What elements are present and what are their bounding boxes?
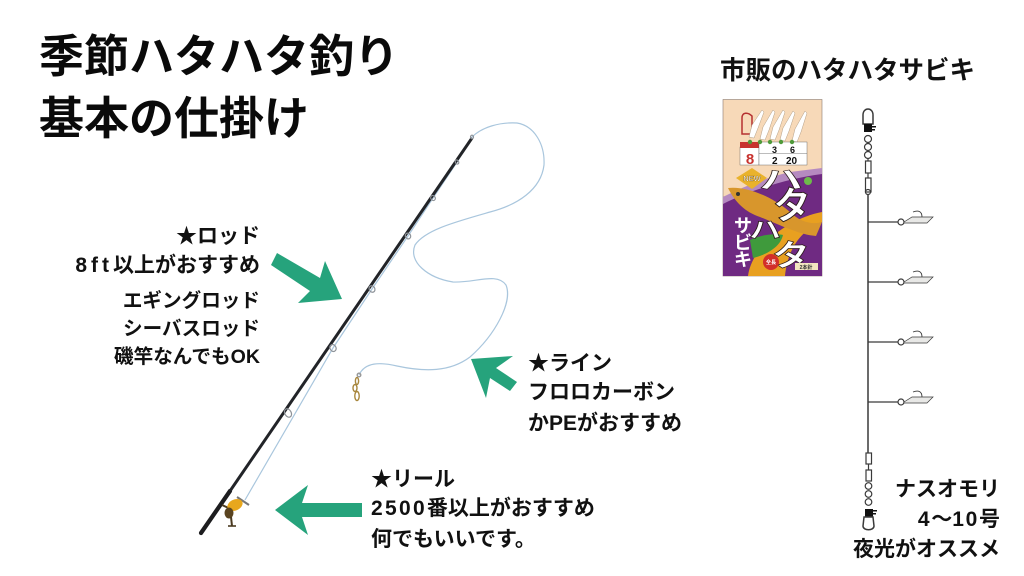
package: commercial sabiki: 2本針: [800, 264, 812, 271]
diagram: sabiki rig: [863, 109, 933, 530]
package: commercial sabiki: NEW: [743, 174, 762, 183]
text block: line recommendation: ★ライン: [528, 352, 612, 375]
text block: rod recommendation: ★ロッド: [176, 225, 260, 248]
text block: rod recommendation: シーバスロッド: [123, 318, 260, 340]
package: commercial sabiki: 3: [772, 145, 777, 155]
text block: sinker note: 4〜10号: [918, 508, 1000, 531]
text block: line recommendation: フロロカーボン: [528, 381, 675, 404]
arrow: rod: [271, 253, 342, 303]
text block: reel recommendation: ★リール: [371, 468, 455, 491]
hook branch 3: [868, 331, 933, 345]
title: [39, 31, 399, 144]
package: commercial sabiki: 8: [746, 151, 754, 168]
text block: rod recommendation: 8ft以上がおすすめ: [75, 254, 260, 277]
main line: [867, 194, 869, 453]
text block: line recommendation: [528, 352, 682, 435]
heading: commercial sabiki: 市販のハタハタサビキ: [720, 57, 975, 85]
text block: rod recommendation: エギングロッド: [123, 290, 260, 312]
hook branch 2: [868, 271, 933, 285]
package: commercial sabiki: タ: [772, 239, 810, 273]
text block: rod recommendation: 磯竿なんでもOK: [114, 346, 260, 368]
hook branch 4: [868, 391, 933, 405]
package: commercial sabiki: ハ: [749, 216, 781, 243]
text block: rod recommendation: [75, 225, 260, 368]
icon: spinning reel: [222, 497, 249, 526]
text block: sinker note: 夜光がオススメ: [853, 538, 1000, 561]
top swivel: [863, 109, 876, 194]
text block: reel recommendation: 2500番以上がおすすめ: [371, 497, 595, 520]
title: 基本の仕掛け: [39, 93, 309, 144]
package: commercial sabiki: 6: [790, 145, 795, 155]
package: commercial sabiki: タ: [773, 186, 811, 228]
package: commercial sabiki: 20: [786, 156, 798, 167]
text block: line recommendation: かPEがおすすめ: [528, 412, 682, 435]
arrow: line: [471, 356, 517, 398]
package: commercial sabiki: 全長: [766, 259, 776, 266]
arrow: reel: [275, 485, 362, 535]
text block: sinker note: [853, 478, 1000, 561]
text block: sinker note: ナスオモリ: [895, 478, 1000, 501]
bottom swivel: [863, 453, 877, 530]
package: commercial sabiki: サ: [734, 216, 752, 236]
text block: reel recommendation: 何でもいいです。: [371, 528, 536, 551]
rod: [201, 135, 474, 533]
hook branch 1: [868, 211, 933, 225]
package: commercial sabiki: ビ: [734, 232, 752, 253]
package: commercial sabiki: 2: [772, 156, 778, 167]
title: 季節ハタハタ釣り: [39, 31, 399, 82]
package: commercial sabiki: [723, 100, 822, 276]
icon: line swivel: [353, 373, 361, 400]
package: commercial sabiki: ハ: [759, 165, 803, 195]
text block: reel recommendation: [371, 468, 595, 551]
package: commercial sabiki: キ: [734, 250, 752, 270]
fishing line: [245, 123, 544, 500]
